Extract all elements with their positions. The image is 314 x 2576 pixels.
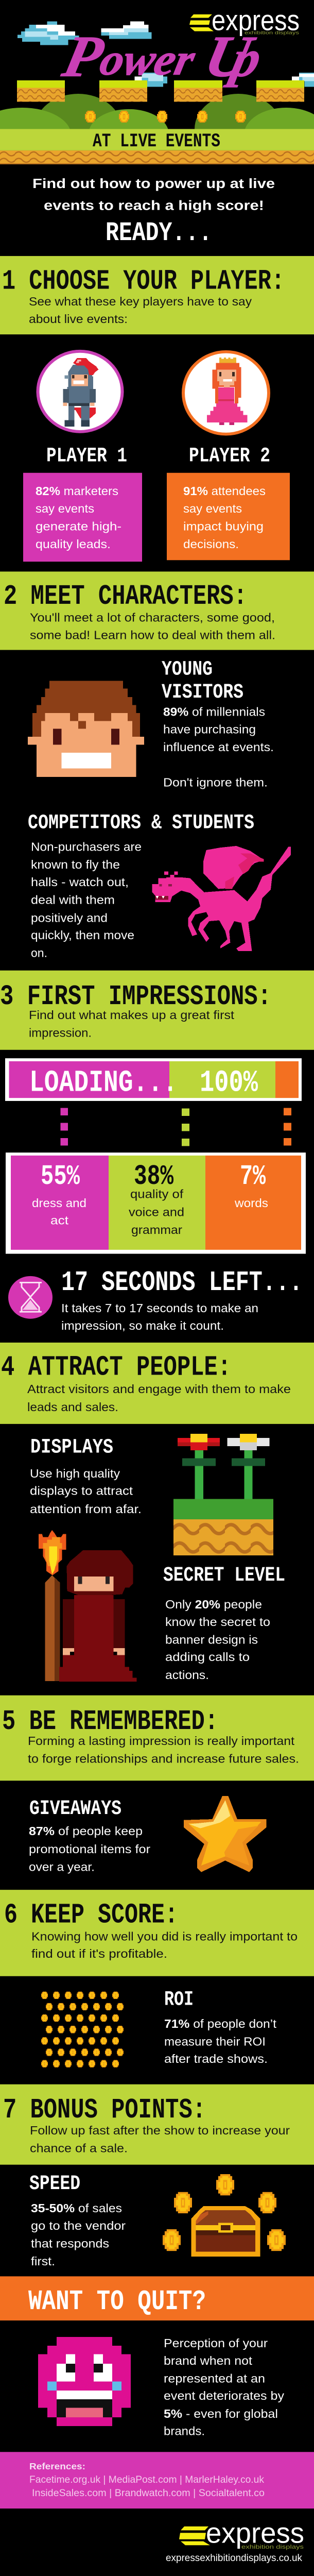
section 1 intro: See what these key players have to say <box>29 295 252 308</box>
loading percent: 100% <box>200 1066 258 1100</box>
panel: want to quit header <box>0 2276 314 2320</box>
references heading: References: <box>29 2461 85 2471</box>
heading young visitors: VISITORS <box>162 681 243 704</box>
section 4 intro: leads and sales. <box>27 1400 118 1414</box>
giveaways copy <box>29 1825 150 1873</box>
secret level copy: adding calls to <box>165 1651 250 1664</box>
stat box 1: 82% marketers <box>36 484 118 498</box>
stat box 1: generate high- <box>36 520 121 533</box>
stat box 2: decisions. <box>183 538 239 551</box>
quit copy: event deteriorates by <box>164 2389 284 2402</box>
panel: section 5 header <box>0 1696 314 1781</box>
ROI copy <box>164 2017 276 2065</box>
panel: references <box>0 2452 314 2509</box>
speed copy: go to the vendor <box>31 2219 126 2232</box>
section 6 intro: Knowing how well you did is really important to <box>31 1930 298 1943</box>
stat 55 percent: 55% <box>41 1160 80 1192</box>
panel: giveaways <box>29 1796 266 1873</box>
title script: P <box>57 24 110 89</box>
section 2 intro: some bad! Learn how to deal with them all. <box>30 629 275 641</box>
player 1 label: PLAYER 1 <box>46 445 127 468</box>
heading competitors: COMPETITORS & STUDENTS <box>28 811 254 835</box>
section 5 intro <box>28 1734 299 1766</box>
competitors copy: on. <box>31 946 47 960</box>
icon: coin grid <box>41 1992 124 2067</box>
panel: section 3 header <box>0 971 314 1050</box>
stat 55 percent: dress and <box>32 1196 86 1210</box>
seconds copy: It takes 7 to 17 seconds to make an <box>61 1302 258 1315</box>
section 2 intro <box>30 611 275 641</box>
intro text <box>32 176 275 213</box>
stat 38 percent: voice and <box>129 1206 184 1218</box>
logo: express: exhibition displays <box>245 30 299 35</box>
avatar circle 2 <box>183 352 269 434</box>
icon: flowers on ground <box>173 1434 273 1555</box>
title script: ower <box>96 35 211 84</box>
icon: knight <box>63 358 98 427</box>
stat box 2: 91% attendees <box>183 484 266 498</box>
panel: competitors and students <box>28 811 291 960</box>
secret level copy: actions. <box>165 1668 209 1682</box>
young visitors copy: 89% of millennials <box>163 705 265 719</box>
orange wavy ground <box>0 150 314 164</box>
panel: section 4 header <box>0 1343 314 1424</box>
section 7 intro <box>30 2124 290 2155</box>
young visitors copy <box>163 705 274 789</box>
competitors copy: halls - watch out, <box>31 875 129 889</box>
footer url: expressexhibitiondisplays.co.uk <box>166 2552 302 2564</box>
quit copy <box>164 2336 284 2437</box>
band heading: AT LIVE EVENTS <box>93 131 220 152</box>
stat 7 percent: 7% <box>240 1160 266 1192</box>
icon: treasure chest with coins <box>163 2174 286 2257</box>
quit copy: brands. <box>164 2425 205 2437</box>
icon: star <box>184 1796 266 1872</box>
young visitors copy: Don't ignore them. <box>163 776 268 789</box>
stat 38 percent: grammar <box>131 1223 182 1236</box>
section 3 intro <box>29 1008 234 1040</box>
quit copy: Perception of your <box>164 2336 268 2350</box>
panel: secret level <box>163 1564 285 1682</box>
giveaways copy: promotional items for <box>29 1842 150 1856</box>
displays copy: Use high quality <box>30 1467 120 1480</box>
panel: section 1 header <box>0 256 314 334</box>
references list: Facetime.org.uk | MediaPost.com | MarlerHaley.co.uk <box>29 2474 264 2485</box>
icon: pixel boy face <box>28 681 144 777</box>
ROI heading: ROI <box>164 1988 194 2011</box>
seconds copy: impression, so make it count. <box>61 1319 224 1332</box>
clouds <box>18 22 314 87</box>
giveaways copy: 87% of people keep <box>29 1825 143 1838</box>
section 1 intro <box>29 295 252 326</box>
young visitors copy: influence at events. <box>163 740 274 754</box>
competitors copy: deal with them <box>31 893 115 907</box>
speed heading: SPEED <box>29 2172 80 2196</box>
displays copy <box>30 1467 142 1516</box>
stat 7 percent: words <box>234 1196 268 1210</box>
section 3 intro: impression. <box>29 1026 92 1040</box>
ready heading: READY... <box>106 218 212 248</box>
references list <box>29 2474 265 2499</box>
speed copy: first. <box>31 2255 55 2268</box>
ROI copy: after trade shows. <box>164 2053 268 2065</box>
heading 5: 5 BE REMEMBERED: <box>2 1705 218 1738</box>
section 7 intro: chance of a sale. <box>30 2142 128 2155</box>
stat box 1 <box>23 473 142 562</box>
icon: wizard with torch <box>39 1530 136 1682</box>
speed copy: 35-50% of sales <box>31 2202 122 2215</box>
displays copy: attention from afar. <box>30 1503 142 1516</box>
heading young visitors <box>162 658 243 704</box>
icon: crying emoji <box>38 2337 131 2426</box>
speed copy <box>31 2202 126 2268</box>
competitors copy: known to fly the <box>31 858 120 871</box>
giveaways heading: GIVEAWAYS <box>29 1797 121 1821</box>
heading 2: 2 MEET CHARACTERS: <box>4 580 247 613</box>
section 4 intro <box>27 1383 291 1414</box>
secret level copy: Only 20% people <box>165 1598 262 1611</box>
quit copy: 5% - even for global <box>164 2407 278 2420</box>
quit copy: brand when not <box>164 2354 252 2367</box>
dotted connectors <box>61 1108 291 1146</box>
ROI copy: measure their ROI <box>164 2035 266 2048</box>
stat box 2 <box>167 473 290 560</box>
ROI copy: 71% of people don’t <box>164 2017 276 2030</box>
heading 4: 4 ATTRACT PEOPLE: <box>1 1351 231 1383</box>
heading 6: 6 KEEP SCORE: <box>4 1899 178 1931</box>
panel: section 6 header <box>0 1890 314 1976</box>
heading young visitors: YOUNG <box>162 658 213 681</box>
competitors copy: quickly, then move <box>31 928 134 942</box>
stat box 2: impact buying <box>183 520 264 533</box>
icon: hourglass <box>8 1276 53 1319</box>
stat box 1: quality leads. <box>36 538 111 551</box>
displays heading: DISPLAYS <box>30 1436 113 1459</box>
competitors copy <box>31 840 142 960</box>
panel: young visitors <box>162 658 274 789</box>
icon: pink dragon <box>152 846 291 951</box>
section 7 intro: Follow up fast after the show to increase your <box>30 2124 290 2137</box>
title script: U <box>199 24 260 89</box>
section 5 intro: to forge relationships and increase future sales. <box>28 1752 299 1766</box>
stat 38 percent: quality of <box>130 1188 183 1201</box>
section 5 intro: Forming a lasting impression is really important <box>28 1734 294 1748</box>
logo: express: express <box>212 5 300 37</box>
section 2 intro: You'll meet a lot of characters, some good, <box>30 611 275 624</box>
panel: player 2 <box>167 352 290 560</box>
green band <box>0 129 314 150</box>
quit heading: WANT TO QUIT? <box>28 2285 206 2318</box>
footer logo: exhibition displays <box>241 2544 304 2550</box>
hero banner <box>0 22 314 164</box>
speed copy: that responds <box>31 2237 109 2250</box>
stat 38 percent: 38% <box>134 1160 173 1192</box>
competitors copy: positively and <box>31 911 108 924</box>
footer logo: express <box>206 2517 304 2549</box>
panel: section 7 header <box>0 2084 314 2165</box>
intro text: Find out how to power up at live <box>32 176 275 191</box>
stat 55 percent <box>32 1160 86 1227</box>
heading 7: 7 BONUS POINTS: <box>3 2094 206 2126</box>
stat box 1: say events <box>36 502 94 515</box>
panel: impression breakdown <box>6 1153 306 1254</box>
secret level copy <box>165 1598 270 1682</box>
panel: ROI <box>41 1988 276 2067</box>
section 6 intro: find out if it's profitable. <box>31 1947 167 1960</box>
panel: player 1 <box>23 351 142 562</box>
quit copy: represented at an <box>164 2372 265 2385</box>
stat 7 percent <box>234 1160 268 1210</box>
coins <box>85 111 246 123</box>
stat 55 percent: act <box>50 1214 68 1227</box>
loading bar <box>5 1058 302 1101</box>
competitors copy: Non-purchasers are <box>31 840 142 853</box>
panel: 17 seconds <box>8 1266 303 1332</box>
panel: speed <box>29 2172 286 2268</box>
panel: section 2 header <box>0 571 314 650</box>
loading text: LOADING... <box>29 1066 178 1100</box>
player 2 label: PLAYER 2 <box>189 445 270 468</box>
section 3 intro: Find out what makes up a great first <box>29 1008 234 1022</box>
secret level copy: banner design is <box>165 1633 258 1646</box>
icon: princess <box>207 358 247 425</box>
stat box 2: say events <box>183 502 242 515</box>
giveaways copy: over a year. <box>29 1860 95 1873</box>
seconds copy <box>61 1302 258 1332</box>
section 1 intro: about live events: <box>29 312 128 326</box>
references list: InsideSales.com | Brandwatch.com | Socialtalent.co <box>32 2487 265 2499</box>
secret level copy: know the secret to <box>165 1615 270 1629</box>
young visitors copy: have purchasing <box>163 723 256 736</box>
title script: p <box>223 29 267 88</box>
platforms <box>17 80 304 101</box>
panel: displays <box>30 1436 142 1516</box>
section 4 intro: Attract visitors and engage with them to make <box>27 1383 291 1396</box>
stat 38 percent <box>129 1160 184 1236</box>
displays copy: displays to attract <box>30 1484 133 1497</box>
avatar circle 1 <box>38 351 123 432</box>
hills <box>0 94 314 164</box>
secret level heading: SECRET LEVEL <box>163 1564 285 1587</box>
intro text: events to reach a high score! <box>44 198 264 213</box>
section 6 intro <box>31 1930 298 1960</box>
